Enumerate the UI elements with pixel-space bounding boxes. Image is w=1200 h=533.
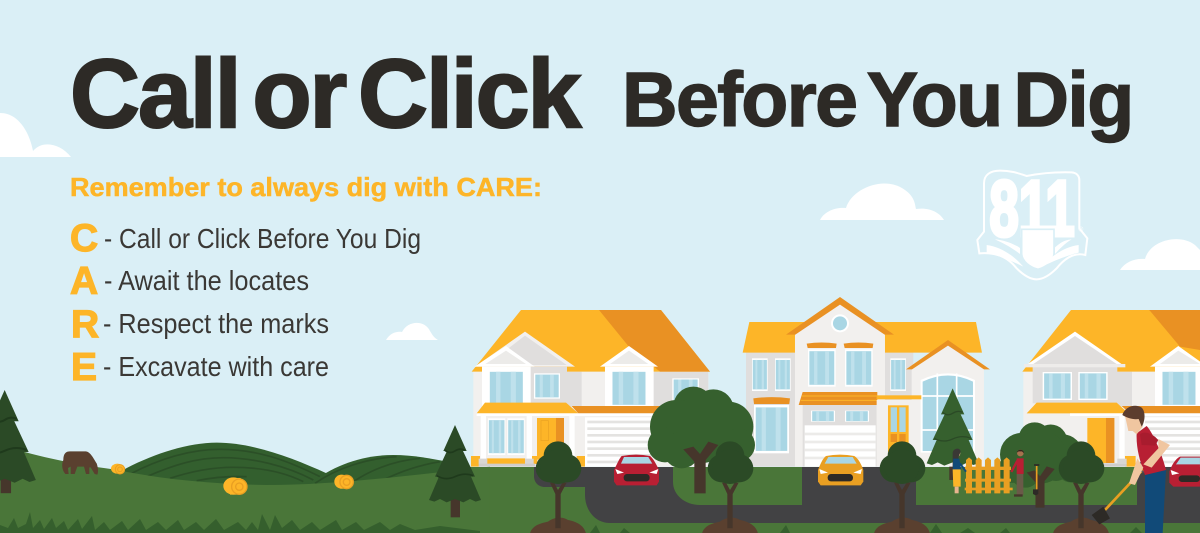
shovel (1105, 469, 1143, 510)
item C: - Call or Click Before You Dig (104, 223, 421, 254)
far hill 1 (120, 443, 333, 493)
door (1087, 418, 1114, 463)
round window (831, 314, 849, 332)
gable right (1150, 346, 1200, 367)
jeans (1145, 470, 1166, 533)
side walls (746, 352, 799, 467)
picket fence (965, 457, 1013, 493)
garage door (585, 417, 653, 467)
arched window (921, 373, 975, 453)
porch roofs (572, 406, 662, 413)
item A (70, 260, 309, 303)
cloud: centre right (820, 183, 944, 220)
porch roofs (1122, 406, 1200, 413)
head (1125, 416, 1143, 434)
far hill 2 (310, 455, 467, 487)
house left (471, 310, 710, 467)
item E: E (71, 346, 97, 389)
item E (71, 346, 329, 389)
meadow (0, 445, 490, 533)
item C (70, 217, 421, 260)
porch columns (481, 416, 486, 459)
item A: A (70, 260, 98, 303)
farmland hills (0, 390, 490, 533)
cloud: top left (0, 113, 71, 157)
person in red shirt with shovel (1011, 450, 1039, 497)
upper windows (752, 358, 768, 391)
door (537, 418, 564, 460)
small tree 2 (702, 441, 758, 533)
small tree 4 (1053, 441, 1109, 533)
gable back (475, 332, 575, 367)
cow (62, 451, 98, 475)
subheading: Remember to always dig with CARE: (70, 172, 542, 202)
entry (877, 400, 920, 467)
lower left window (754, 405, 789, 453)
man digging (1092, 406, 1170, 533)
cloud: small (386, 323, 438, 340)
item E: - Excavate with care (103, 351, 329, 382)
main roof (1022, 310, 1200, 372)
asphalt road and driveways (534, 467, 1200, 523)
title: Before You Dig: Before You Dig (622, 57, 1133, 143)
small tree 3 (874, 441, 930, 533)
garage roof (799, 392, 877, 405)
cloud: far right (1120, 239, 1200, 270)
foundation (471, 456, 585, 467)
gable (1024, 332, 1125, 367)
gable front left (475, 346, 535, 367)
ground lawn (470, 467, 1200, 533)
big tree right (998, 422, 1084, 508)
foreground grass strip (470, 523, 1200, 533)
grass tufts right (590, 524, 1142, 533)
shirt (1137, 426, 1166, 475)
item R: - Respect the marks (103, 308, 329, 339)
main roof (472, 310, 710, 372)
item C: C (70, 217, 98, 260)
wall (1023, 372, 1200, 467)
icon: 811 logo (977, 163, 1087, 279)
right wing (912, 345, 984, 467)
pine tree (927, 388, 979, 466)
item R (71, 303, 329, 346)
columns (1119, 416, 1125, 459)
hay bale middle (223, 477, 247, 495)
foundation (1125, 456, 1136, 467)
icon: 811 logo: ® (1078, 225, 1083, 233)
hay bale small (111, 464, 125, 474)
title: Call or Click: Call or Click (70, 39, 582, 148)
main roof (743, 322, 982, 353)
arms (1143, 439, 1170, 468)
right edge roof fill (1149, 310, 1200, 350)
gable right (600, 346, 658, 367)
icon: 811 logo: 811 (989, 163, 1075, 252)
big tree left (648, 387, 755, 493)
centre wall (795, 303, 885, 467)
person in yellow skirt (949, 449, 966, 493)
wall (473, 372, 708, 467)
parked car orange (818, 455, 863, 485)
item R: R (71, 303, 99, 346)
garage door (805, 425, 876, 467)
window awnings (753, 342, 873, 404)
house centre (743, 297, 990, 467)
house right (1022, 310, 1200, 467)
pine right of meadow (429, 425, 481, 517)
parked car red left (614, 455, 659, 485)
grass tufts (0, 512, 480, 533)
window upstairs (488, 370, 525, 407)
pine left (0, 390, 36, 493)
small tree 1 (530, 441, 586, 533)
garage door (1143, 417, 1200, 467)
hay bale right (334, 475, 353, 489)
garage bay (803, 405, 877, 467)
parked car red right (1169, 457, 1200, 487)
item A: - Await the locates (104, 265, 309, 296)
CARE list (70, 217, 421, 389)
